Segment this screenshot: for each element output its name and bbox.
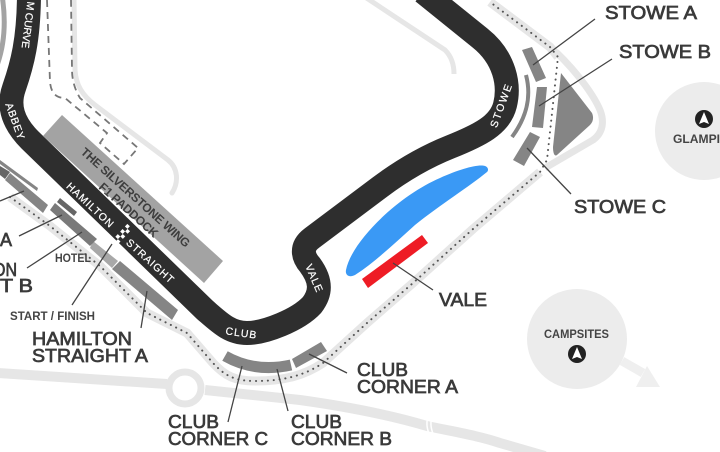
campsites area: CAMPSITES [544, 327, 609, 341]
label: Hamilton Straight A [32, 329, 148, 366]
label: Club Corner A [357, 360, 458, 397]
grandstands: Club corner [225, 342, 327, 368]
spectator walkway with dots [10, 2, 602, 381]
inner service road: right [362, 0, 454, 74]
glamping area: GLAMPI [673, 132, 720, 146]
glamping area [655, 82, 720, 180]
track labels: STRAIGHT [123, 237, 176, 286]
track labels: ABBEY [2, 101, 27, 141]
track labels: HAMILTON [64, 181, 116, 230]
inner service road: left [74, 0, 177, 193]
track labels [2, 1, 515, 342]
leader lines [0, 19, 612, 422]
label: Club Corner A: CLUB [357, 360, 408, 380]
track labels: CLUB [225, 325, 257, 342]
panel: Silverstone Wing F1 paddock: THE SILVERSTONE WING [78, 145, 193, 250]
stand: top left edge [0, 0, 4, 68]
label: Vale: VALE [439, 290, 487, 310]
start finish chequered line [113, 224, 132, 244]
label: Hamilton Straight B partial [0, 260, 33, 296]
label: Hamilton Straight A: HAMILTON [32, 329, 132, 349]
label: Club Corner B: CORNER B [291, 429, 392, 449]
race track [11, 0, 507, 333]
track labels: STOWE [488, 83, 515, 129]
lake [346, 166, 488, 276]
label: Stowe A: STOWE A [605, 3, 697, 23]
label: partial A: A [0, 230, 12, 250]
perimeter road: bottom [0, 372, 545, 452]
label: Club Corner C: CLUB [168, 412, 219, 432]
label: Club Corner B: CLUB [291, 412, 342, 432]
grandstand: Vale [362, 235, 428, 288]
label: Club Corner C: CORNER C [168, 429, 268, 449]
dashed paddock boundary [47, 0, 138, 164]
campsites area [527, 289, 660, 389]
label: Hamilton Straight A: STRAIGHT A [32, 346, 148, 366]
grandstands: Hamilton straight [0, 160, 178, 320]
panel: Silverstone Wing F1 paddock: F1 PADDOCK [96, 180, 161, 241]
grandstands: Stowe [512, 47, 593, 166]
label: Hamilton Straight B partial: T B [0, 276, 33, 296]
label: Stowe C: STOWE C [574, 197, 666, 217]
track labels: M CURVE [19, 1, 36, 49]
track labels: VALE [302, 263, 325, 294]
panel: Silverstone Wing F1 paddock [43, 115, 223, 283]
label: Start / Finish: START / FINISH [10, 309, 95, 323]
label: Club Corner B [291, 412, 392, 449]
label: Stowe B: STOWE B [619, 42, 711, 62]
label: Club Corner A: CORNER A [357, 377, 458, 397]
label: Club Corner C [168, 412, 268, 449]
label: Hotel: HOTEL [55, 251, 91, 265]
